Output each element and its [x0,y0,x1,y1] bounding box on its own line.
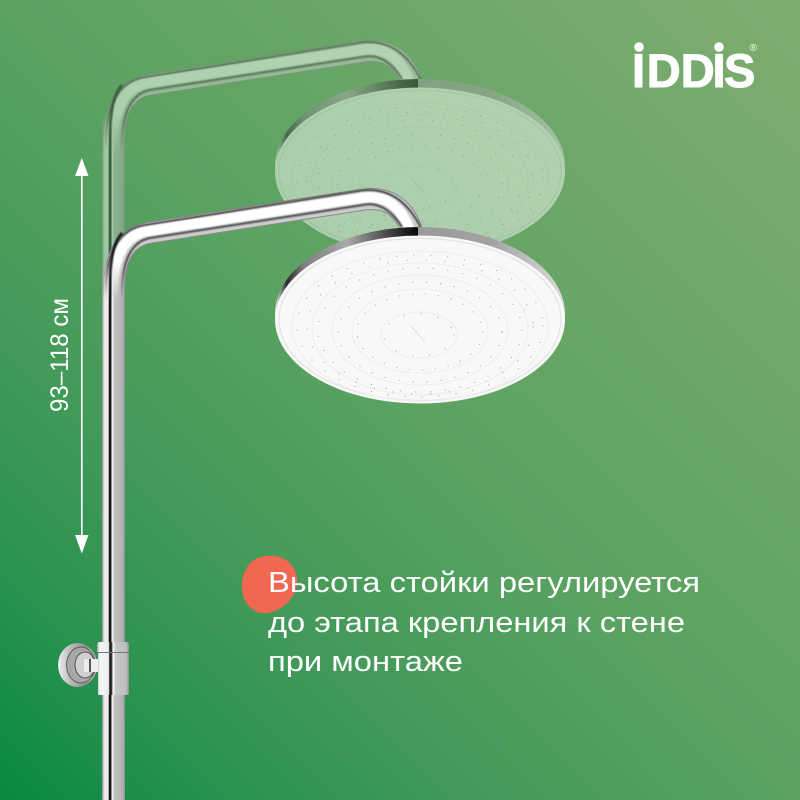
raised shower head [275,79,565,256]
height arrow [75,158,88,554]
wall mount [58,643,98,687]
shower pipe and arm [102,190,421,800]
raised pipe and arm [102,42,421,652]
sliding clamp [97,642,129,695]
brand logo: IDDIS [632,44,755,97]
ghost shower in raised position [102,42,565,652]
height label: 93–118 см [46,298,74,412]
main caption: до этапа крепления к стене [268,607,685,639]
red accent blob [242,556,297,613]
brand logo: ® [750,43,758,54]
main caption: при монтаже [268,646,463,678]
main caption [268,567,700,678]
main caption: Высота стойки регулируется [268,567,700,599]
shower head [275,227,565,404]
